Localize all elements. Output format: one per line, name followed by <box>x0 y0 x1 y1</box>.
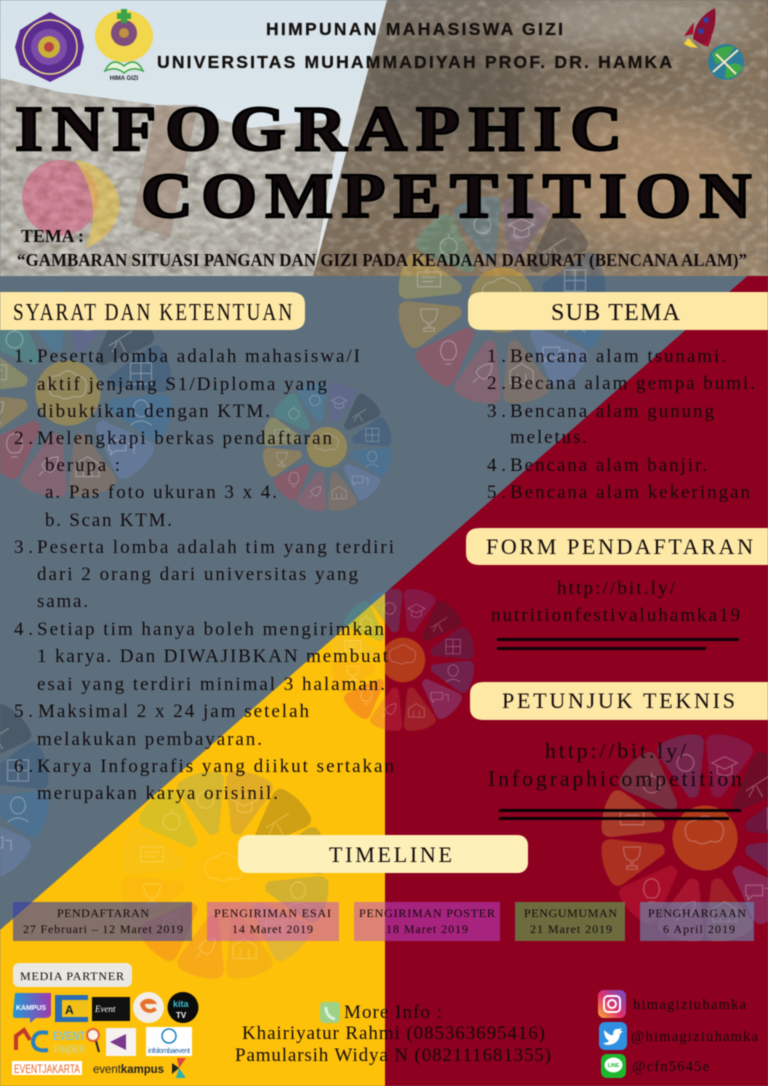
heading: timeline: TIMELINE <box>329 842 452 867</box>
heading: form pendaftaran <box>466 528 768 565</box>
logo: HIMA GIZI: HIMA GIZI <box>110 76 139 82</box>
media partner label: MEDIA PARTNER <box>20 969 124 983</box>
registration link <box>491 578 740 650</box>
text block: terms list: aktif jenjang S1/Diploma yang <box>37 374 328 395</box>
guideline link <box>488 738 742 820</box>
text block: sub theme list: 2. <box>487 373 506 394</box>
text block: terms list: 1 karya. Dan DIWAJIBKAN membuat <box>37 646 389 667</box>
icon: phone <box>320 1002 340 1023</box>
text block: sub theme list: 5. <box>487 482 506 503</box>
label: line handle: @cfn5645e <box>632 1059 709 1075</box>
text block: terms list: 6. <box>14 756 33 777</box>
timeline: pengiriman poster <box>354 902 500 941</box>
media partner label <box>13 963 132 987</box>
text block: sub theme list: Bencana alam gunung <box>510 401 714 422</box>
timeline: pengumuman: PENGUMUMAN <box>524 906 617 920</box>
organiser heading: HIMPUNAN MAHASISWA GIZI <box>266 19 563 39</box>
heading: syarat dan ketentuan <box>0 292 305 330</box>
text block: terms list: melakukan pembayaran. <box>37 729 262 750</box>
text block: sub theme list: Bencana alam kekeringan <box>510 482 750 503</box>
title: INFOGRAPHIC <box>15 93 622 164</box>
media partner logos: A <box>65 1003 74 1017</box>
media partner logos <box>12 992 198 1078</box>
timeline: pengiriman poster: 18 Maret 2019 <box>386 922 468 936</box>
title: COMPETITION <box>141 160 751 231</box>
timeline: pengiriman esai: 14 Maret 2019 <box>232 922 313 936</box>
text block: terms list: esai yang terdiri minimal 3 halaman. <box>37 674 385 695</box>
organiser heading: UNIVERSITAS MUHAMMADIYAH PROF. DR. HAMKA <box>157 52 672 72</box>
media partner logos: kita <box>173 999 190 1009</box>
text block: contact info <box>235 1002 551 1066</box>
text block: sub theme list: Bencana alam banjir. <box>510 455 707 476</box>
text block: terms list: Melengkapi berkas pendaftaran <box>37 428 332 449</box>
timeline: pendaftaran: PENDAFTARAN <box>57 906 149 920</box>
heading: timeline <box>238 835 528 873</box>
guideline link: http://bit.ly/ <box>545 738 687 763</box>
icon: instagram <box>598 990 626 1018</box>
media partner logos: KAMPUS <box>16 1005 46 1012</box>
icon: globe <box>708 44 744 80</box>
organiser heading <box>157 19 672 72</box>
text block: terms list: sama. <box>37 591 88 612</box>
registration link: http://bit.ly/ <box>557 578 676 599</box>
text block: sub theme list: 1. <box>487 346 506 367</box>
icon: line: LINE <box>608 1063 620 1069</box>
text block: terms list: 1. <box>14 346 33 367</box>
text block: terms list: a. Pas foto ukuran 3 x 4. <box>45 482 277 503</box>
logo: HIMA GIZI <box>95 9 153 82</box>
text block: sub theme list: 4. <box>487 455 506 476</box>
guideline link: Infographicompetition <box>488 766 742 791</box>
timeline: penghargaan <box>640 902 754 941</box>
timeline: pengumuman <box>515 902 625 941</box>
theme text <box>17 226 747 271</box>
text block: terms list: berupa : <box>45 455 120 476</box>
media partner logos: Event <box>94 1004 116 1014</box>
text block: terms list: dari 2 orang dari universitas yang <box>37 564 359 585</box>
heading: petunjuk teknis <box>470 682 768 720</box>
media partner logos: TV <box>176 1011 187 1020</box>
title <box>15 93 751 231</box>
text block: terms list: 4. <box>14 619 33 640</box>
text block: sub theme list: Becana alam gempa bumi. <box>510 373 755 394</box>
registration link: nutritionfestivaluhamka19 <box>491 605 740 626</box>
timeline: pengiriman esai <box>207 902 339 941</box>
text block: terms list: b. Scan KTM. <box>45 510 172 531</box>
heading: form pendaftaran: FORM PENDAFTARAN <box>486 534 753 559</box>
background icon wheels <box>0 160 768 983</box>
timeline: pendaftaran <box>13 902 192 941</box>
media partner logos: EVENTJAKARTA <box>14 1062 80 1076</box>
text block: terms list: 5. <box>14 701 33 722</box>
text block: contact info: More Info : <box>344 1002 442 1023</box>
text block: terms list: 2. <box>14 428 33 449</box>
timeline: pendaftaran: 27 Februari – 12 Maret 2019 <box>23 922 183 936</box>
heading: sub tema: SUB TEMA <box>551 300 681 326</box>
icon: twitter <box>599 1022 627 1050</box>
text block: sub theme list: 3. <box>487 401 506 422</box>
text block: sub theme list: meletus. <box>510 427 587 448</box>
heading: sub tema <box>468 292 768 330</box>
timeline: penghargaan: PENGHARGAAN <box>648 906 746 920</box>
header photo collage <box>0 0 768 276</box>
label: instagram handle: himagiziuhamka <box>633 997 747 1013</box>
timeline: penghargaan: 6 April 2019 <box>663 922 735 936</box>
text block: terms list: 3. <box>14 537 33 558</box>
text block: terms list <box>14 346 395 804</box>
theme text: “GAMBARAN SITUASI PANGAN DAN GIZI PADA KEADAAN DARURAT (BENCANA ALAM)” <box>17 250 747 271</box>
text block: terms list: Peserta lomba adalah tim yang terdiri <box>37 537 394 558</box>
heading: petunjuk teknis: PETUNJUK TEKNIS <box>502 688 735 713</box>
timeline: pengiriman esai: PENGIRIMAN ESAI <box>214 906 331 920</box>
media partner logos: infolombaevent <box>148 1048 190 1055</box>
icon: rocket <box>684 8 716 48</box>
text block: terms list: Peserta lomba adalah mahasiswa/I <box>37 346 360 367</box>
theme text: TEMA : <box>21 226 84 246</box>
text block: terms list: Karya Infografis yang diikut sertakan <box>37 756 395 777</box>
text block: sub theme list: Bencana alam tsunami. <box>510 346 726 367</box>
text block: terms list: Setiap tim hanya boleh mengirimkan <box>37 619 384 640</box>
timeline: pengiriman poster: PENGIRIMAN POSTER <box>359 906 495 920</box>
label: twitter handle: @himagiziuhamka <box>631 1029 759 1045</box>
media partner logos: EVENT <box>53 1029 86 1043</box>
media partner logos: eventkampus <box>93 1062 164 1076</box>
text block: contact info: Khairiyatur Rahmi (085363695416) <box>242 1023 545 1044</box>
text block: terms list: merupakan karya orisinil. <box>37 783 278 804</box>
text block: sub theme list <box>487 346 755 503</box>
logo: university seal <box>15 12 84 82</box>
heading: syarat dan ketentuan: SYARAT DAN KETENTUAN <box>13 299 292 326</box>
timeline: pengumuman: 21 Maret 2019 <box>530 922 612 936</box>
media partner logos: FINDER <box>54 1044 85 1056</box>
text block: terms list: dibuktikan dengan KTM. <box>37 401 270 422</box>
text block: contact info: Pamularsih Widya N (082111681355) <box>235 1045 551 1066</box>
text block: terms list: Maksimal 2 x 24 jam setelah <box>38 701 310 722</box>
icon: line <box>601 1054 626 1078</box>
